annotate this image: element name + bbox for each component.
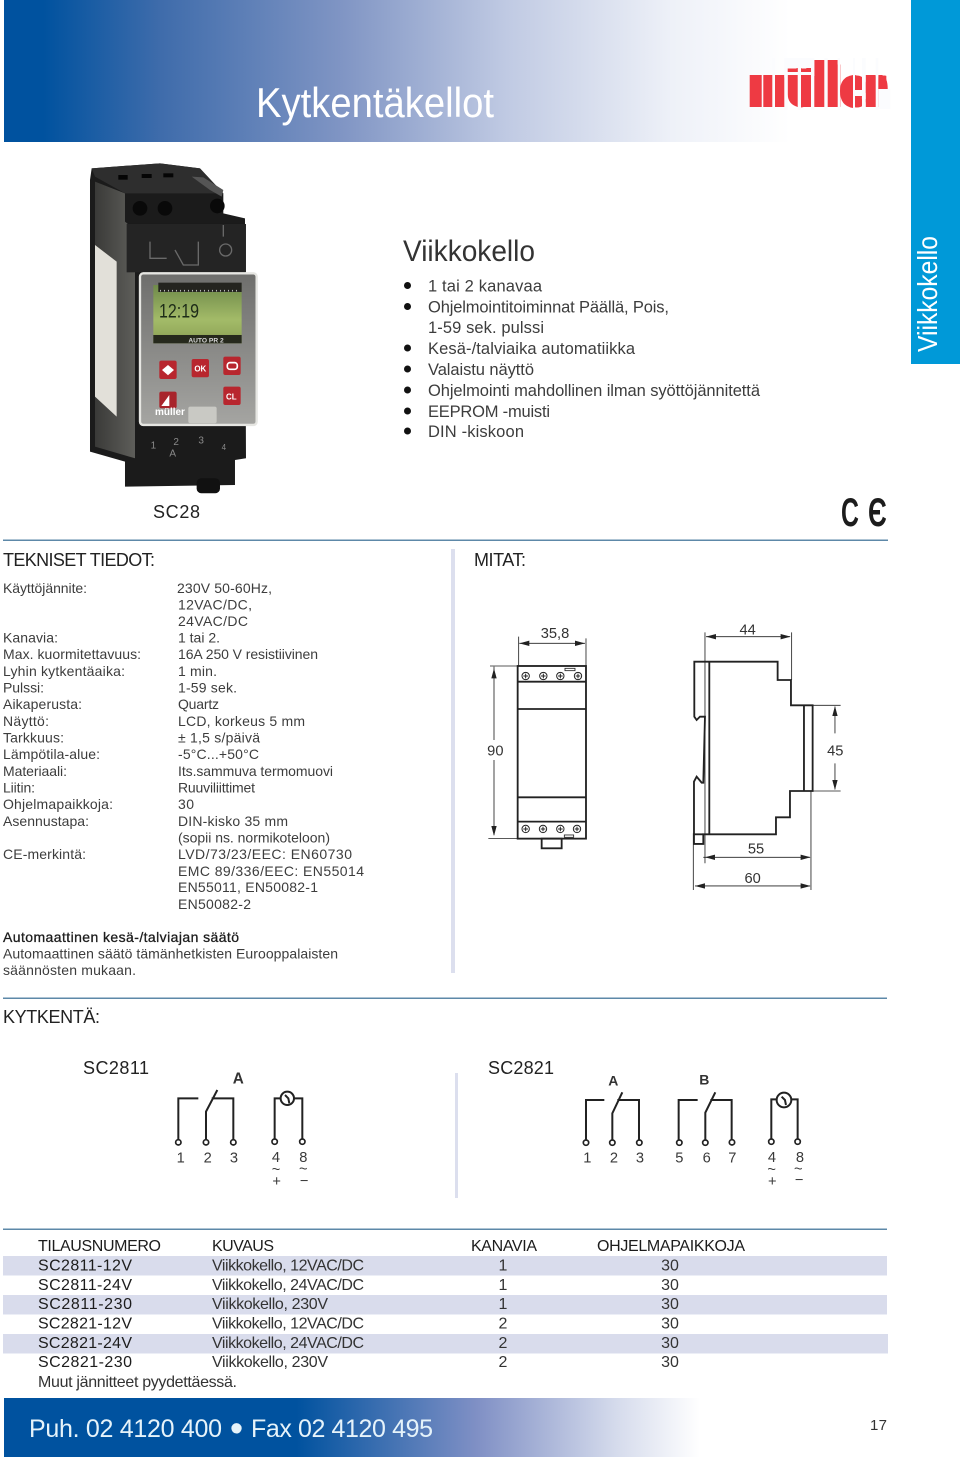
- feature list: Valaistu näyttö: [428, 361, 534, 379]
- order table: 1: [499, 1277, 508, 1294]
- dimension drawing: side view: [693, 623, 843, 890]
- heading: Viikkokello: Viikkokello: [403, 235, 535, 268]
- wiring diagram: SC2821: [583, 1072, 804, 1190]
- technical data table: Ruuviliittimet: [178, 780, 255, 796]
- product code: SC28: [153, 502, 200, 522]
- buttons: CL: [226, 392, 237, 401]
- product photo: müller: [155, 407, 185, 418]
- product photo: 3: [198, 435, 204, 446]
- heading: technical data: TEKNISET TIEDOT:: [3, 550, 155, 570]
- technical data table: 12VAC/DC,: [178, 596, 252, 612]
- dimension drawing: front view: [487, 626, 586, 848]
- order table: Viikkokello, 12VAC/DC: [212, 1316, 364, 1332]
- technical data table: CE-merkintä:: [3, 846, 86, 862]
- contact line: •: [230, 1408, 243, 1450]
- order table: SC2821-24V: [38, 1335, 132, 1352]
- technical data table: Lyhin kytkentäaika:: [3, 663, 125, 679]
- wiring diagram: SC2821: ~: [767, 1162, 776, 1178]
- dimension drawing: front view: 35,8: [541, 626, 569, 642]
- feature list: DIN -kiskoon: [428, 423, 524, 441]
- tab label: Viikkokello: [912, 236, 943, 352]
- wiring diagram: SC2821: 6: [703, 1151, 711, 1167]
- technical data table: Aikaperusta:: [3, 696, 82, 712]
- daylight saving note: [3, 929, 338, 978]
- icon: CE mark: C: [841, 491, 859, 536]
- technical data table: Quartz: [178, 696, 219, 712]
- label: SC2811: SC2811: [83, 1058, 149, 1078]
- order table: OHJELMAPAIKKOJA: [597, 1238, 745, 1255]
- technical data table: Liitin:: [3, 780, 35, 796]
- wiring diagram: SC2821: +: [768, 1174, 777, 1190]
- wiring diagram: SC2821: 5: [675, 1151, 683, 1167]
- wiring diagram: SC2811: +: [272, 1174, 281, 1190]
- dimension drawing: front view: 90: [487, 743, 503, 759]
- feature list: [404, 278, 761, 441]
- technical data table: -5°C...+50°C: [178, 746, 259, 762]
- LCD time: 12:19: [159, 301, 199, 322]
- dimension drawing: side view: 44: [739, 623, 756, 639]
- wiring diagram: SC2821: 1: [583, 1151, 591, 1167]
- order table: 30: [661, 1277, 679, 1294]
- technical data table: DIN-kisko 35 mm: [178, 813, 288, 829]
- dimension drawing: side view: 45: [827, 743, 843, 759]
- technical data table: EN55011, EN50082-1: [178, 879, 318, 895]
- technical data table: Kanavia:: [3, 630, 58, 646]
- wiring diagram: SC2821: 4: [768, 1150, 776, 1166]
- technical data table: LCD, korkeus 5 mm: [178, 713, 305, 729]
- technical data table: Lämpötila-alue:: [3, 746, 100, 762]
- logo: müller: müller: [749, 55, 887, 120]
- order table: SC2811-24V: [38, 1277, 132, 1294]
- wiring diagram: SC2811: [176, 1070, 308, 1190]
- technical data table: EMC 89/336/EEC: EN55014: [178, 863, 364, 879]
- technical data table: Materiaali:: [3, 763, 67, 779]
- feature list: Ohjelmointi mahdollinen ilman syöttöjännitettä: [428, 382, 761, 400]
- order table: 2: [499, 1354, 508, 1371]
- technical data table: ± 1,5 s/päivä: [178, 730, 260, 746]
- product photo: 2: [173, 437, 179, 448]
- table note: Muut jännitteet pyydettäessä.: [38, 1374, 237, 1391]
- order table: 30: [661, 1296, 679, 1313]
- wiring diagram: SC2811: 8: [299, 1150, 307, 1166]
- technical data table: [3, 580, 364, 912]
- technical data table: 1-59 sek.: [178, 680, 237, 696]
- title: Kytkentäkellot: [256, 79, 494, 126]
- technical data table: Its.sammuva termomuovi: [178, 763, 333, 779]
- buttons: OK: [194, 365, 207, 374]
- wiring diagram: SC2821: 8: [796, 1150, 804, 1166]
- order table: Viikkokello, 230V: [212, 1296, 328, 1313]
- order table: Viikkokello, 24VAC/DC: [212, 1335, 364, 1352]
- order table: KUVAUS: [212, 1238, 274, 1255]
- order table: 1: [499, 1258, 508, 1274]
- technical data table: Pulssi:: [3, 680, 44, 696]
- order table: Viikkokello, 24VAC/DC: [212, 1277, 364, 1294]
- technical data table: 24VAC/DC: [178, 613, 248, 629]
- technical data table: Tarkkuus:: [3, 730, 64, 746]
- wiring diagram: SC2811: A: [233, 1070, 244, 1087]
- feature list: 1-59 sek. pulssi: [428, 319, 544, 337]
- order table: 30: [661, 1335, 679, 1352]
- technical data table: 30: [178, 796, 194, 812]
- feature list: Ohjelmointitoiminnat Päällä, Pois,: [428, 298, 669, 316]
- daylight saving note: Automaattinen kesä-/talviajan säätö: [3, 929, 239, 945]
- label: SC2821: SC2821: [488, 1058, 554, 1078]
- feature list: 1 tai 2 kanavaa: [428, 278, 543, 296]
- technical data table: 1 min.: [178, 663, 217, 679]
- page number: 17: [870, 1417, 887, 1434]
- order table: SC2821-230: [38, 1354, 132, 1371]
- product photo: [90, 163, 257, 493]
- technical data table: Näyttö:: [3, 713, 49, 729]
- technical data table: Ohjelmapaikkoja:: [3, 796, 113, 812]
- feature list: Kesä-/talviaika automatiikka: [428, 340, 636, 358]
- wiring diagram: SC2811: ~: [272, 1162, 280, 1178]
- icon: CE mark: [841, 491, 887, 536]
- buttons: [159, 357, 241, 408]
- technical data table: (sopii ns. normikoteloon): [178, 830, 330, 846]
- order table: Viikkokello, 12VAC/DC: [212, 1258, 364, 1274]
- feature list: EEPROM -muisti: [428, 403, 550, 421]
- order table: SC2811-230: [38, 1296, 132, 1313]
- order table: 2: [499, 1316, 508, 1332]
- technical data table: 230V 50-60Hz,: [177, 580, 272, 596]
- order table: 30: [661, 1354, 679, 1371]
- order table: 30: [661, 1258, 679, 1274]
- wiring diagram: SC2811: ~: [299, 1161, 308, 1177]
- product photo: 4: [222, 443, 227, 452]
- technical data table: LVD/73/23/EEC: EN60730: [178, 846, 352, 862]
- product photo: AUTO PR 2: [188, 337, 224, 344]
- icon: CE mark: Є: [868, 491, 887, 535]
- heading: dimensions: MITAT:: [474, 550, 526, 570]
- wiring diagram: SC2821: 3: [636, 1151, 644, 1167]
- order table: 2: [499, 1335, 508, 1352]
- technical data table: Max. kuormitettavuus:: [3, 646, 141, 662]
- order table: SC2811-12V: [38, 1258, 132, 1274]
- wiring diagram: SC2811: −: [300, 1173, 308, 1189]
- product photo: 1: [151, 440, 157, 451]
- order table: TILAUSNUMERO: [38, 1238, 161, 1255]
- technical data table: 16A 250 V resistiivinen: [178, 646, 318, 662]
- wiring diagram: SC2821: 2: [610, 1151, 618, 1167]
- dimension drawing: side view: 60: [744, 871, 761, 887]
- wiring diagram: SC2821: 7: [728, 1151, 736, 1167]
- wiring diagram: SC2821: −: [795, 1173, 803, 1189]
- order table: SC2821-12V: [38, 1316, 132, 1332]
- technical data table: EN50082-2: [178, 896, 251, 912]
- wiring diagram: SC2821: ~: [794, 1161, 803, 1177]
- contact line: Fax 02 4120 495: [251, 1415, 433, 1443]
- order table: Viikkokello, 230V: [212, 1354, 328, 1371]
- product photo: A: [169, 449, 176, 460]
- dimension drawing: side view: 55: [748, 841, 764, 857]
- footer banner: [4, 1398, 700, 1457]
- daylight saving note: Automaattinen säätö tämänhetkisten Eurooppalaisten: [3, 946, 338, 962]
- daylight saving note: säännösten mukaan.: [3, 962, 136, 978]
- order table: 30: [661, 1316, 679, 1332]
- wiring diagram: SC2821: B: [699, 1072, 709, 1088]
- wiring diagram: SC2821: A: [608, 1072, 618, 1088]
- header banner: [4, 0, 911, 142]
- order table: [3, 1238, 888, 1391]
- order table: KANAVIA: [471, 1238, 537, 1255]
- wiring diagram: SC2811: 4: [272, 1150, 280, 1166]
- wiring diagram: SC2811: 2: [204, 1151, 212, 1167]
- technical data table: Käyttöjännite:: [3, 580, 87, 596]
- technical data table: Asennustapa:: [3, 813, 89, 829]
- side tab: [911, 0, 960, 364]
- technical data table: 1 tai 2.: [178, 630, 220, 646]
- wiring diagram: SC2811: 1: [177, 1151, 185, 1167]
- order table: 1: [499, 1296, 508, 1313]
- wiring diagram: SC2811: 3: [230, 1151, 238, 1167]
- contact line: Puh. 02 4120 400: [29, 1415, 222, 1443]
- contact line: [29, 1408, 433, 1450]
- heading: wiring: KYTKENTÄ:: [3, 1007, 100, 1027]
